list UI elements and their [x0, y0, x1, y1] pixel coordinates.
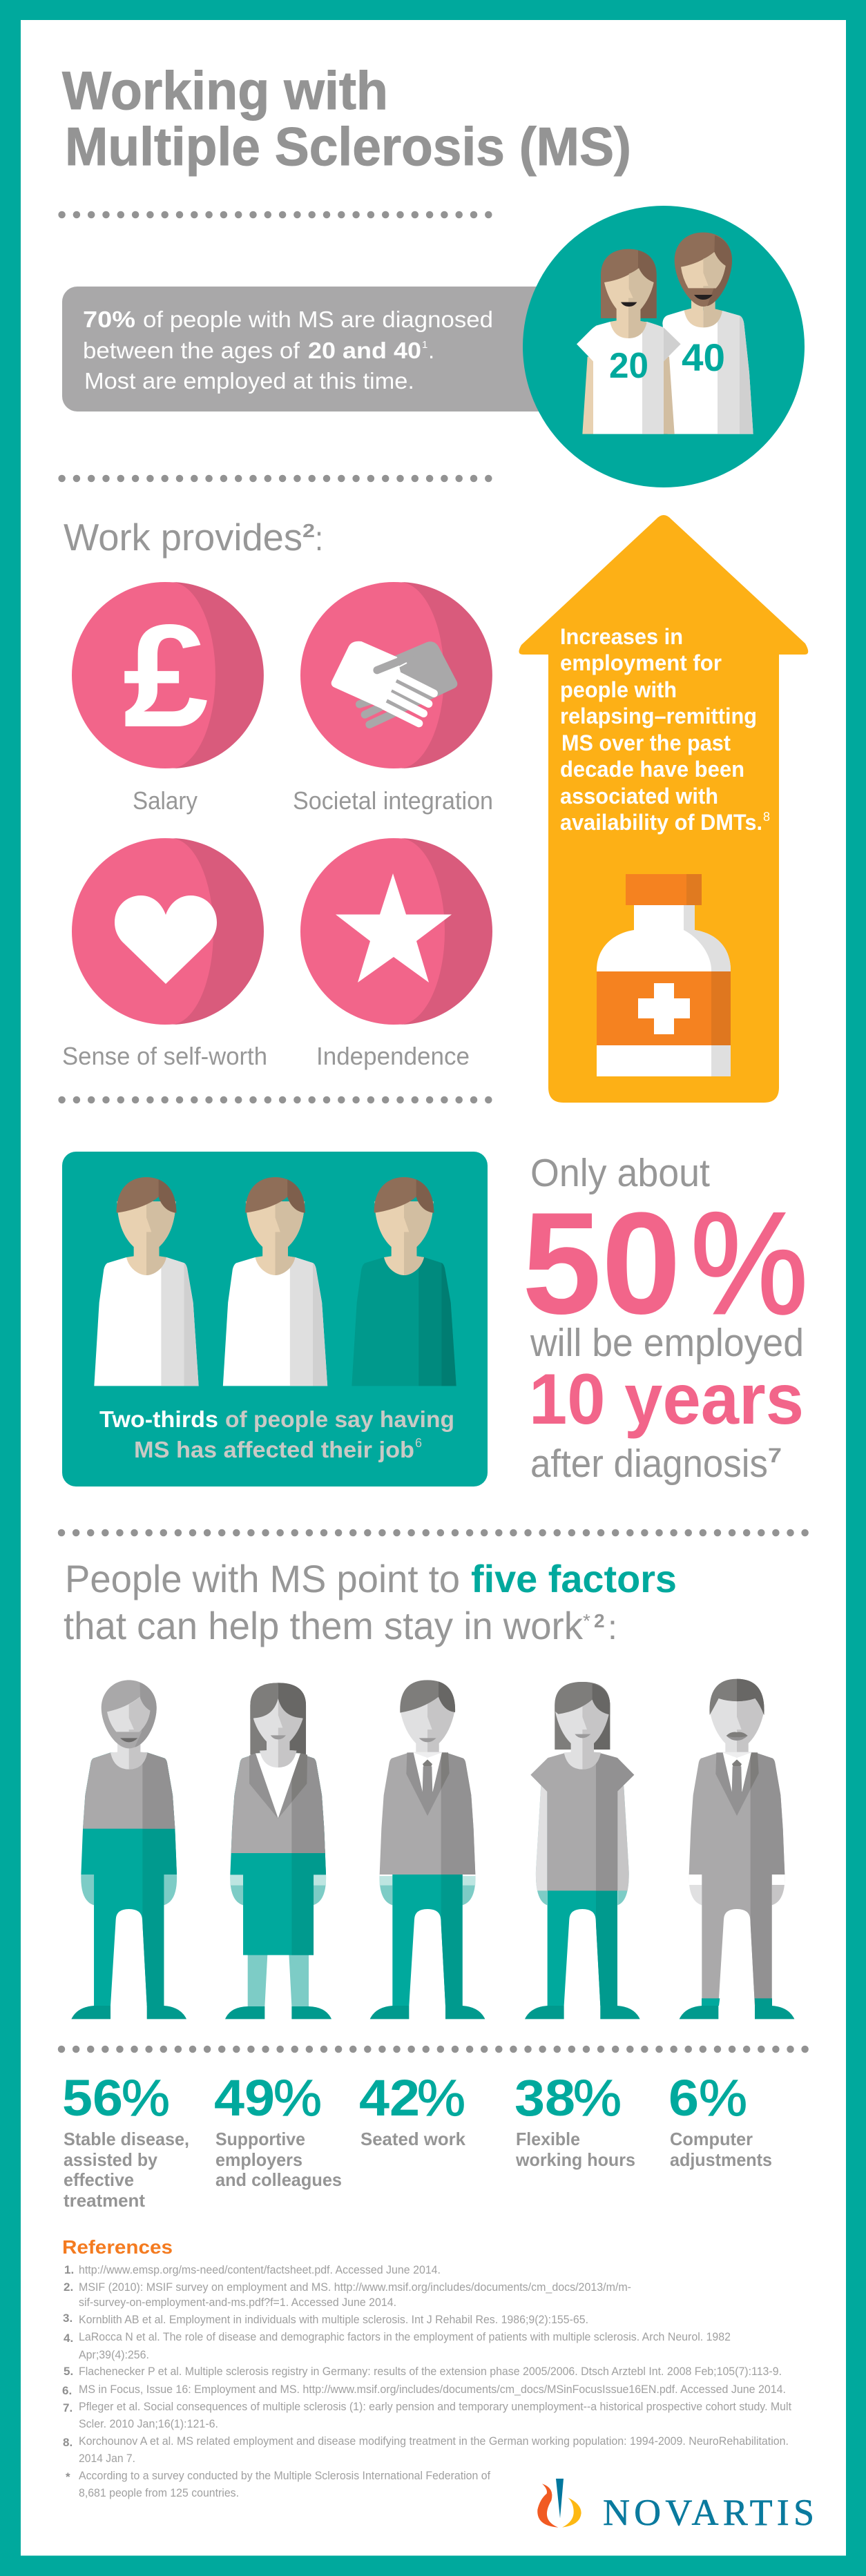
- figure: woman in jacket, supportive employers: [225, 1683, 331, 2019]
- stat: 49% supportive employers: %: [273, 2069, 322, 2127]
- stat: 38% flexible working hours: Flexible: [516, 2129, 580, 2149]
- icon: salary pound sign: £: [123, 594, 209, 757]
- references list: Flachenecker P et al. Multiple sclerosis registry in Germany: results of the extension phase 2005/2006. Dtsch Arztebl Int. 2008 Feb;105(7):113-9.: [79, 2365, 782, 2378]
- references list: http://www.emsp.org/ms-need/content/factsheet.pdf. Accessed June 2014.: [79, 2263, 441, 2276]
- panel caption: MS has affected their job: [134, 1437, 414, 1462]
- stat: only about 50% employed after 10 years: after diagnosis: [530, 1442, 768, 1486]
- panel caption: [99, 1406, 454, 1462]
- heading: Work provides: :: [315, 519, 323, 558]
- references list: 2014 Jan 7.: [79, 2452, 135, 2465]
- arrow text: decade have been: [560, 757, 744, 782]
- callout: 70% diagnosed between 20 and 40: 20 and 40: [308, 338, 421, 363]
- figure: man with moustache, computer adjustments: [680, 1679, 794, 2019]
- stat: only about 50% employed after 10 years: will be employed: [530, 1321, 804, 1365]
- arrow text: people with: [560, 677, 677, 702]
- heading: five factors: 2: [594, 1610, 605, 1631]
- callout: 70% diagnosed between 20 and 40: of people with MS are diagnosed: [143, 307, 493, 332]
- references list: MS in Focus, Issue 16: Employment and MS. http://www.msif.org/includes/documents/cm_docs/MSinFocusIssue16EN.pdf. Accessed June 2014.: [79, 2383, 786, 2396]
- references list: 4.: [64, 2332, 73, 2345]
- stat: 6% computer adjustments: %: [699, 2069, 747, 2127]
- figure: man in suit, seated work: [370, 1680, 485, 2019]
- stat: 6% computer adjustments: adjustments: [670, 2149, 772, 2170]
- stat: 56% stable disease: 56: [62, 2069, 123, 2127]
- references list: 6.: [62, 2384, 72, 2397]
- references list: sif-survey-on-employment-and-ms.pdf?f=1. Accessed June 2014.: [79, 2296, 396, 2309]
- icon: independence star: [300, 838, 492, 1025]
- figure: person 2 white: [223, 1177, 327, 1386]
- callout: 70% diagnosed between 20 and 40: [62, 287, 587, 411]
- panel caption: 6: [415, 1436, 422, 1450]
- references list: According to a survey conducted by the Multiple Sclerosis International Federation of: [79, 2469, 490, 2482]
- arrow text: Increases in: [560, 624, 683, 649]
- title: Multiple Sclerosis (MS): [65, 116, 631, 177]
- label: Societal integration: Societal integration: [293, 786, 493, 815]
- stat: 56% stable disease: effective: [64, 2169, 134, 2190]
- references list: Korchounov A et al. MS related employment and disease modifying treatment in the German working population: 1994-2009. NeuroRehabilitation.: [79, 2434, 789, 2448]
- stat: only about 50% employed after 10 years: 10 years: [529, 1359, 804, 1440]
- references list: Apr;39(4):256.: [79, 2348, 149, 2361]
- figure: woman in t-shirt, flexible working hours: [525, 1682, 640, 2019]
- arrow text: MS over the past: [561, 730, 731, 755]
- stat: 49% supportive employers: [214, 2069, 342, 2190]
- label: Sense of self-worth: Sense of self-worth: [62, 1042, 267, 1070]
- references list: Kornblith AB et al. Employment in individuals with multiple sclerosis. Int J Rehabil Res. 1986;9(2):155-65.: [79, 2313, 588, 2326]
- references list: [62, 2263, 791, 2499]
- illustration: two people aged 20 and 40 in teal circle: 40: [682, 336, 725, 379]
- stat: 6% computer adjustments: [668, 2069, 772, 2170]
- title: Working with: [62, 60, 388, 121]
- stat: 38% flexible working hours: working hours: [515, 2149, 635, 2170]
- heading: five factors: People with MS point to: [65, 1557, 460, 1600]
- label: Independence: Independence: [316, 1042, 470, 1070]
- stat: 38% flexible working hours: %: [573, 2069, 622, 2127]
- stat: 56% stable disease: treatment: [64, 2190, 145, 2211]
- references list: 8,681 people from 125 countries.: [79, 2486, 239, 2499]
- callout: 70% diagnosed between 20 and 40: 1: [422, 339, 427, 351]
- heading: five factors: that can help them stay in work: [64, 1604, 584, 1647]
- stat: 38% flexible working hours: 38: [514, 2069, 575, 2127]
- arrow text: relapsing–remitting: [560, 704, 757, 728]
- heading: references: References: [62, 2236, 173, 2258]
- references list: 3.: [63, 2312, 73, 2325]
- arrow text: availability of DMTs.: [560, 810, 762, 835]
- stat: 49% supportive employers: employers: [215, 2149, 302, 2170]
- stat: 49% supportive employers: Supportive: [215, 2129, 305, 2149]
- stat: 49% supportive employers: and colleagues: [215, 2169, 342, 2190]
- stat: 56% stable disease: Stable disease,: [64, 2129, 189, 2149]
- stat: 42% seated work: [359, 2069, 466, 2149]
- heading: five factors: :: [608, 1608, 617, 1647]
- heading: Work provides: 2: [302, 520, 315, 541]
- figure: man with beard, stable disease: [71, 1680, 186, 2019]
- callout: 70% diagnosed between 20 and 40: Most are employed at this time.: [84, 368, 414, 394]
- stat: only about 50% employed after 10 years: 7: [768, 1444, 782, 1467]
- callout: 70% diagnosed between 20 and 40: .: [428, 338, 434, 363]
- references list: 8.: [63, 2436, 73, 2449]
- stat: 42% seated work: 42: [359, 2069, 420, 2127]
- stat: only about 50% employed after 10 years: %: [691, 1182, 808, 1344]
- panel caption: of people say having: [225, 1406, 454, 1432]
- stat: 56% stable disease: %: [122, 2069, 170, 2127]
- title: [62, 60, 631, 177]
- references list: LaRocca N et al. The role of disease and demographic factors in the employment of patients with multiple sclerosis. Arch Neurol. 1982: [79, 2330, 731, 2343]
- figure: person 3 teal highlighted: [352, 1177, 456, 1386]
- logo: Novartis: [537, 2479, 814, 2533]
- heading: five factors: five factors: [471, 1557, 677, 1600]
- heading: five factors: *: [583, 1610, 590, 1631]
- callout: 70% diagnosed between 20 and 40: between the ages of: [83, 338, 300, 363]
- references list: Pfleger et al. Social consequences of multiple sclerosis (1): early pension and temporary unemployment--a historical prospective cohort study. Mult: [79, 2400, 791, 2413]
- callout: 70% diagnosed between 20 and 40: 70%: [83, 307, 135, 332]
- heading: five factors: [64, 1557, 677, 1647]
- stat: 38% flexible working hours: [514, 2069, 635, 2170]
- arrow: increases in employment: [519, 515, 808, 1103]
- panel caption: Two-thirds: [99, 1406, 218, 1432]
- references list: Scler. 2010 Jan;16(1):121-6.: [79, 2417, 218, 2430]
- references list: 5.: [64, 2365, 73, 2378]
- stat: only about 50% employed after 10 years: 50: [522, 1182, 681, 1344]
- stat: 42% seated work: Seated work: [360, 2129, 466, 2149]
- references list: 7.: [63, 2401, 73, 2414]
- references list: 1.: [64, 2263, 74, 2276]
- stat: 6% computer adjustments: Computer: [670, 2129, 753, 2149]
- icon: societal integration handshake: [300, 582, 492, 768]
- references list: *: [66, 2470, 70, 2483]
- stat: 56% stable disease: [62, 2069, 189, 2211]
- illustration: two people aged 20 and 40 in teal circle: [523, 206, 805, 487]
- stat: 42% seated work: %: [417, 2069, 465, 2127]
- arrow text: associated with: [560, 784, 718, 808]
- stat: only about 50% employed after 10 years: [522, 1151, 808, 1486]
- icon: sense of self-worth heart: [72, 838, 264, 1025]
- icon: salary pound sign: [72, 582, 264, 768]
- panel: two-thirds say MS affected their job: [62, 1152, 488, 1486]
- label: Salary: Salary: [133, 786, 198, 815]
- illustration: two people aged 20 and 40 in teal circle: 20: [609, 346, 648, 386]
- references list: MSIF (2010): MSIF survey on employment and MS. http://www.msif.org/includes/documents/cm_docs/2013/m/m-: [79, 2280, 631, 2294]
- logo: Novartis: NOVARTIS: [603, 2492, 814, 2533]
- heading: Work provides: Work provides: [64, 516, 302, 559]
- figure: person 1 white: [94, 1177, 199, 1386]
- stat: 6% computer adjustments: 6: [668, 2069, 699, 2127]
- arrow text: 8: [763, 810, 770, 824]
- arrow text: employment for: [560, 650, 722, 675]
- stat: 49% supportive employers: 49: [214, 2069, 275, 2127]
- icon: medicine bottle: [597, 874, 731, 1076]
- stat: only about 50% employed after 10 years: Only about: [530, 1151, 710, 1195]
- references list: 2.: [64, 2280, 73, 2294]
- stat: 56% stable disease: assisted by: [64, 2149, 158, 2170]
- arrow text: [560, 624, 770, 835]
